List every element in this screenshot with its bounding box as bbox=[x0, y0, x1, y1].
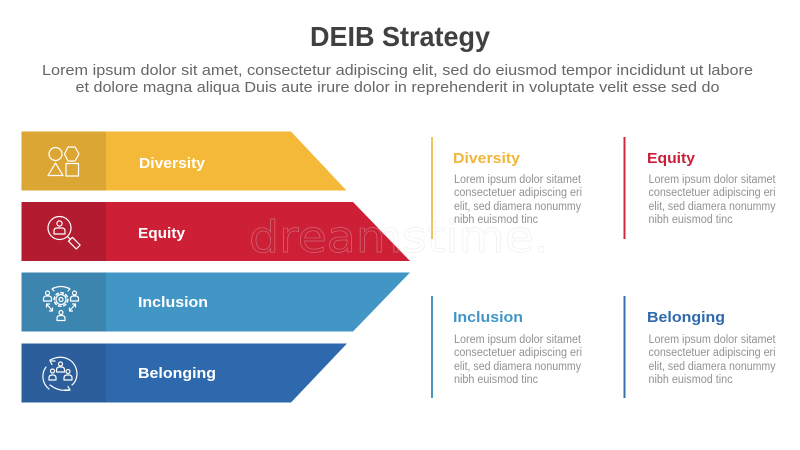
panel: Belonging description: Belonging bbox=[647, 309, 725, 326]
panel: Equity description: nibh euismod tinc bbox=[648, 214, 733, 226]
label: Equity: Equity bbox=[138, 225, 186, 242]
panel: Diversity description: Lorem ipsum dolor sitamet bbox=[454, 174, 582, 186]
panel: Equity description: elit, sed diamera nonummy bbox=[648, 201, 776, 213]
panel: Diversity description: elit, sed diamera nonummy bbox=[454, 201, 581, 213]
panel: Belonging description: Lorem ipsum dolor sitamet bbox=[648, 334, 776, 346]
panel: Equity description: Lorem ipsum dolor sitamet bbox=[648, 174, 776, 186]
bar: Diversity bbox=[22, 132, 346, 190]
subtitle text: Lorem ipsum dolor sit amet, consectetur adipiscing elit, sed do eiusmod tempor incididunt ut labore bbox=[42, 62, 753, 79]
panel: Inclusion description bbox=[431, 296, 582, 398]
bar: Belonging bbox=[22, 344, 347, 402]
icon: group in cycle arrows bbox=[43, 357, 77, 390]
panel: Diversity description: consectetuer adipiscing eri bbox=[454, 187, 582, 199]
subtitle text bbox=[42, 62, 753, 96]
bar: Equity bbox=[22, 202, 410, 261]
panel: Belonging description: consectetuer adipiscing eri bbox=[648, 347, 776, 359]
icon: shapes bbox=[48, 147, 79, 176]
label: Belonging: Belonging bbox=[138, 365, 216, 382]
watermark: dreamstime. bbox=[249, 212, 549, 263]
panel: Diversity description: nibh euismod tinc bbox=[454, 214, 538, 226]
panel: Inclusion description: elit, sed diamera nonummy bbox=[454, 361, 581, 373]
panel: Equity description: consectetuer adipiscing eri bbox=[648, 187, 776, 199]
panel: Belonging description: elit, sed diamera nonummy bbox=[648, 361, 776, 373]
panel: Inclusion description: Lorem ipsum dolor sitamet bbox=[454, 334, 582, 346]
bar: Inclusion bbox=[22, 272, 410, 332]
subtitle text: et dolore magna aliqua Duis aute irure dolor in reprehenderit in voluptate velit esse sed do bbox=[76, 79, 720, 96]
panel: Equity description: Equity bbox=[647, 150, 696, 167]
panel: Equity description bbox=[624, 137, 776, 239]
panel: Inclusion description: Inclusion bbox=[453, 309, 523, 326]
panel: Inclusion description: nibh euismod tinc bbox=[454, 374, 538, 386]
panel: Belonging description: nibh euismod tinc bbox=[648, 374, 733, 386]
icon: people around gear bbox=[44, 286, 78, 320]
panel: Diversity description bbox=[431, 137, 582, 239]
panel: Diversity description: Diversity bbox=[453, 150, 521, 167]
icon: magnifier with person bbox=[48, 216, 80, 249]
label: Inclusion: Inclusion bbox=[138, 294, 208, 311]
panel: Inclusion description: consectetuer adipiscing eri bbox=[454, 347, 582, 359]
panel: Belonging description bbox=[624, 296, 776, 398]
title: DEIB Strategy bbox=[310, 21, 490, 52]
label: Diversity: Diversity bbox=[139, 155, 206, 172]
